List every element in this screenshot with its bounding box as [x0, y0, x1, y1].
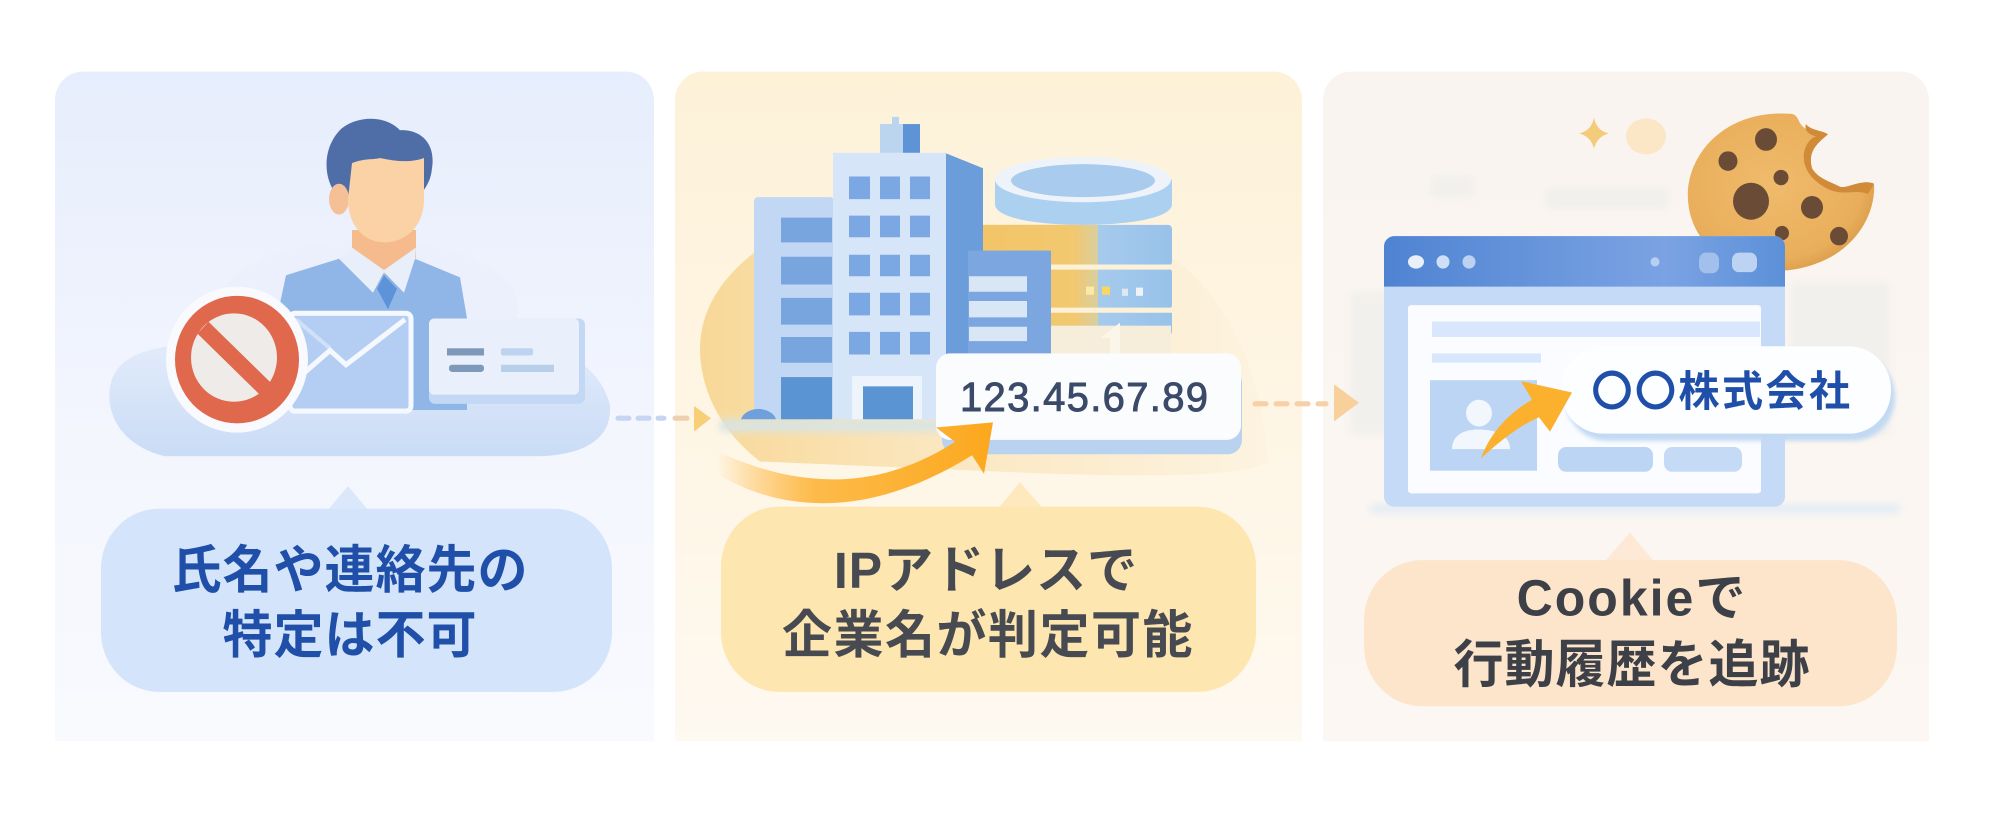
shirt [277, 259, 467, 410]
hair [327, 119, 433, 200]
panel background: blue [55, 72, 654, 741]
face [348, 158, 424, 242]
icon: small building [968, 251, 1051, 355]
ear [329, 184, 349, 215]
blurred smudges [1350, 175, 1890, 436]
arrow: panel 2 to panel 3 [1255, 384, 1359, 421]
yellow blob [700, 230, 1268, 475]
soft back blob [218, 239, 518, 375]
speech bubble: peach [1364, 532, 1897, 706]
illustration: browser and cookie [1350, 113, 1900, 513]
panel background: yellow [675, 72, 1302, 741]
company name: 〇〇株式会社 [1592, 367, 1852, 415]
tie [377, 275, 397, 309]
icon: info card [429, 318, 585, 404]
browser shadow [1370, 505, 1900, 513]
icon: central building [741, 117, 983, 419]
arrow: panel 1 to panel 2 [618, 406, 711, 432]
icon: prohibited sign [166, 287, 308, 433]
neck [352, 230, 416, 274]
IP address card [936, 353, 1242, 454]
icon: database [982, 157, 1172, 357]
speech bubble: blue [101, 486, 612, 692]
icon: envelope [290, 313, 411, 411]
icon: browser window [1384, 236, 1785, 507]
ground shadow [720, 419, 960, 432]
icon: cookie [1688, 113, 1874, 271]
illustration: person with blocked email [109, 119, 610, 456]
heading text [172, 541, 528, 664]
illustration: buildings and IP card [700, 117, 1268, 503]
panel: personal info cannot be identified [55, 72, 654, 741]
heading text: 行動履歴を追跡 [1454, 636, 1810, 694]
heading text [1454, 569, 1810, 694]
cloud base [109, 343, 610, 456]
company name pill [1561, 346, 1895, 441]
panel: IP address identifies company [675, 72, 1302, 741]
arrow: curved orange [717, 422, 993, 503]
heading text: 特定は不可 [223, 606, 477, 664]
icon: dot [1626, 118, 1666, 154]
icon: sparkle [1579, 118, 1609, 149]
arrow: orange to pill [1481, 381, 1572, 458]
infographic: three panels [55, 72, 1929, 741]
image placeholder [1430, 380, 1537, 471]
icon: person [277, 119, 467, 410]
speech bubble: yellow [721, 482, 1256, 692]
panel background: peach [1323, 72, 1929, 741]
heading text: Cookieで [1517, 569, 1747, 627]
panel: cookie tracks browsing history [1323, 72, 1929, 741]
heading text: 氏名や連絡先の [172, 541, 528, 599]
heading text [782, 541, 1194, 664]
icon: left building [754, 197, 834, 419]
heading text: 企業名が判定可能 [782, 606, 1194, 664]
IP address: 123.45.67.89 [960, 374, 1208, 420]
collar [339, 247, 416, 293]
heading text: IPアドレスで [834, 541, 1138, 599]
